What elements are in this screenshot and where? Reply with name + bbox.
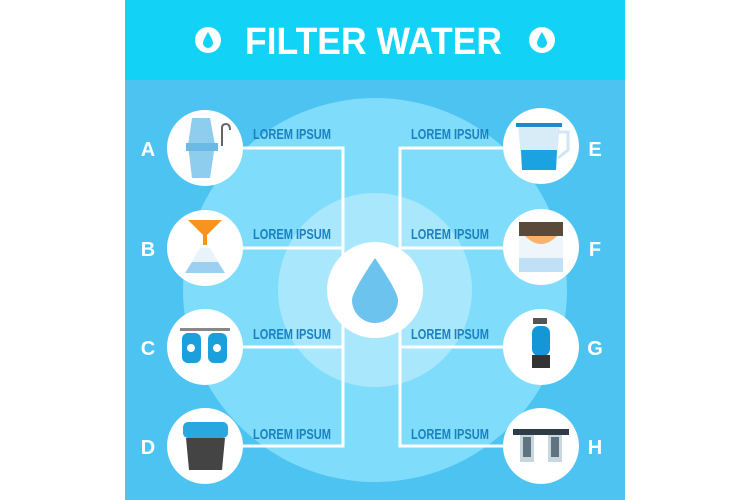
icon D: cartridge [183, 422, 228, 470]
letters: H [588, 437, 602, 459]
icon B: funnel flask [185, 220, 225, 273]
labels text: LOREM IPSUM [411, 426, 489, 443]
labels text: LOREM IPSUM [411, 126, 489, 143]
background circles [183, 98, 567, 482]
icon A: filter jug [186, 118, 230, 178]
icon: header drop right [529, 27, 555, 53]
labels text: LOREM IPSUM [253, 326, 331, 343]
labels text: LOREM IPSUM [253, 226, 331, 243]
icon F: dispenser [519, 222, 563, 272]
center icon: water drop [327, 242, 423, 338]
letters: F [589, 239, 601, 261]
labels text: LOREM IPSUM [253, 426, 331, 443]
icon E: pitcher [516, 123, 568, 170]
icon C: twin tanks [180, 328, 230, 363]
labels text: LOREM IPSUM [411, 326, 489, 343]
header band [125, 0, 625, 80]
letters: C [141, 338, 155, 360]
connector lines [240, 148, 510, 446]
panel: body background [125, 80, 625, 500]
letters: A [141, 139, 155, 161]
letters [141, 139, 603, 459]
labels text: LOREM IPSUM [253, 126, 331, 143]
letters: B [141, 239, 155, 261]
title: FILTER WATER [245, 21, 502, 63]
labels text: LOREM IPSUM [411, 226, 489, 243]
icon G: tank [532, 318, 550, 368]
icon H: double housing [513, 429, 569, 462]
letters: G [587, 338, 603, 360]
letters: E [588, 139, 602, 161]
icon circles [167, 108, 579, 484]
labels text [253, 126, 489, 443]
letters: D [141, 437, 155, 459]
icon: header drop left [195, 27, 221, 53]
